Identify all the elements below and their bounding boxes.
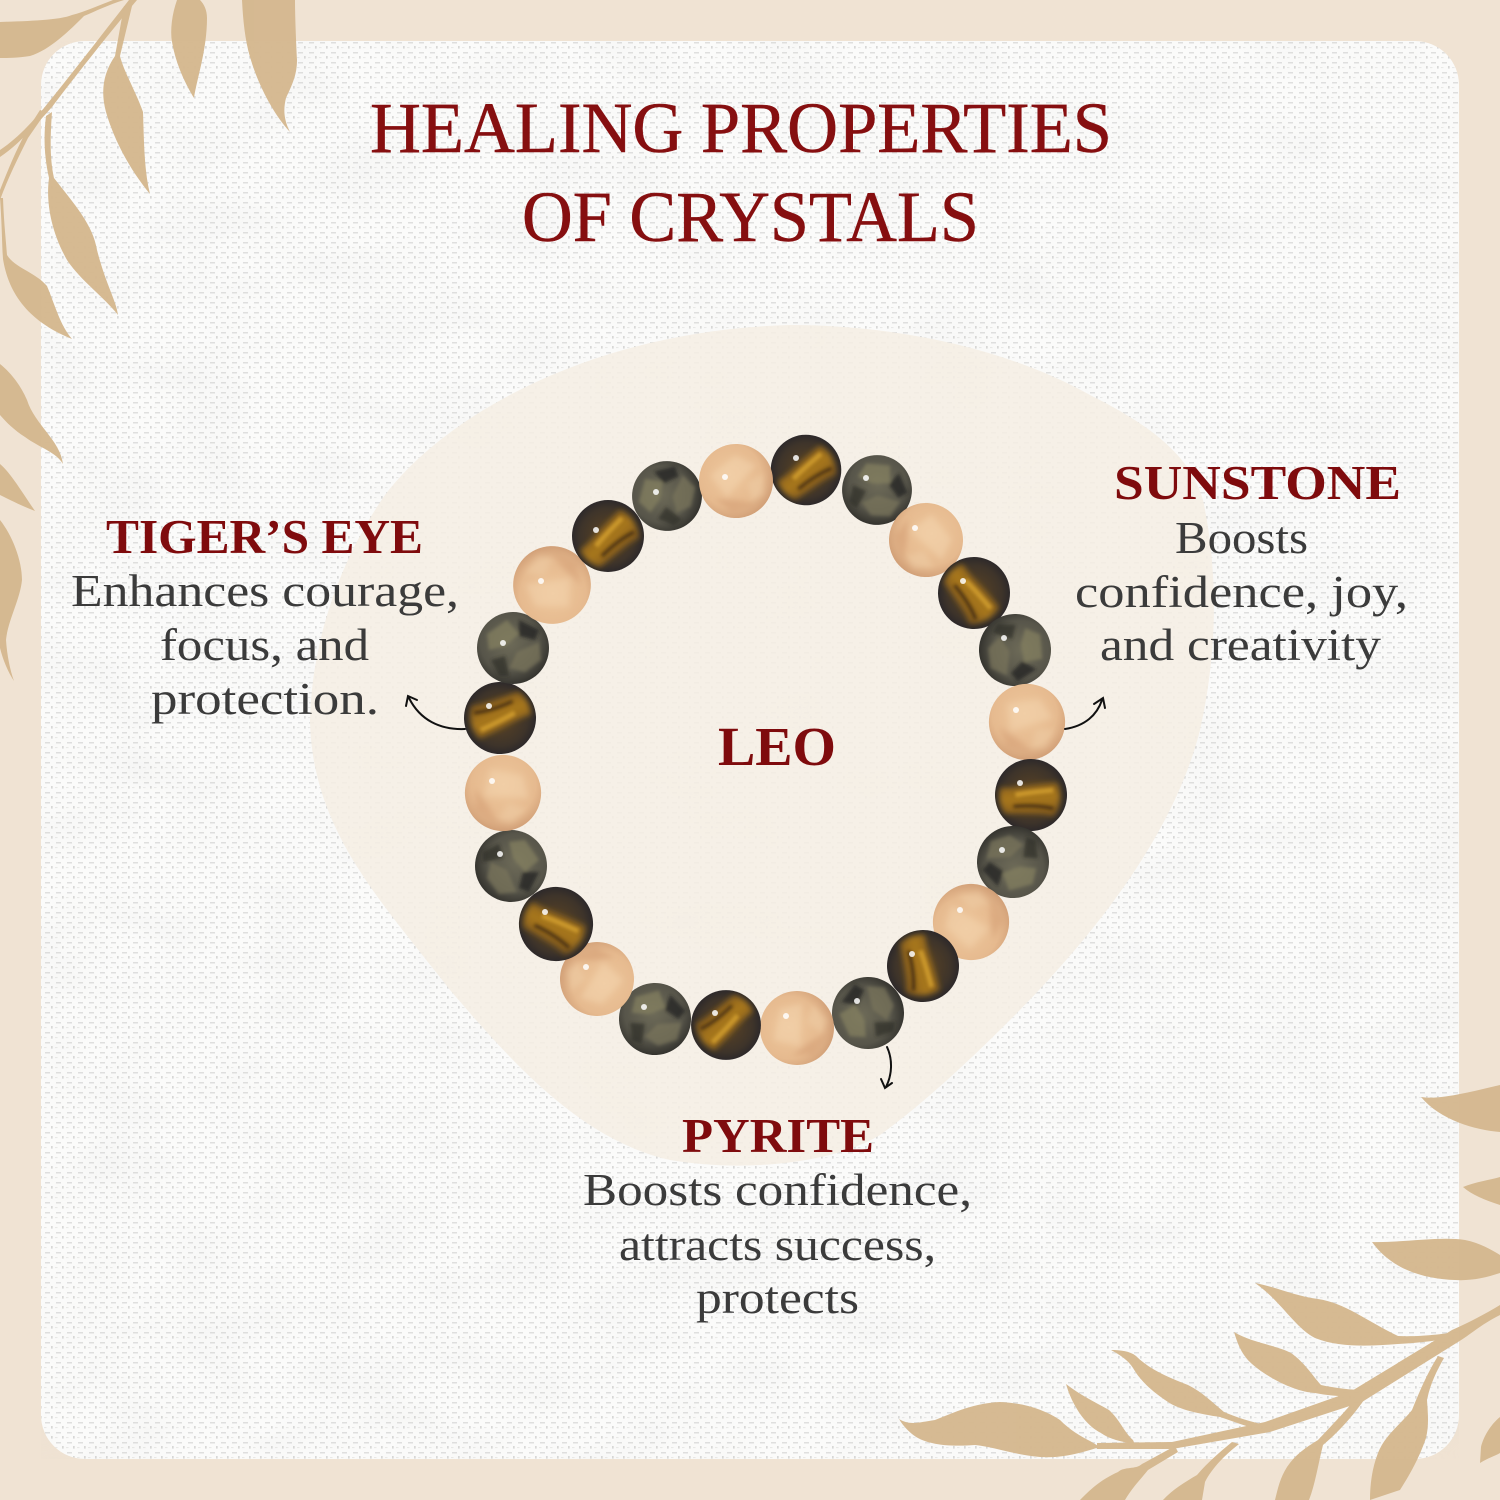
lower branch leaf one <box>1080 1446 1178 1500</box>
callout: sunstone <box>1075 455 1408 670</box>
leaf on top-left branch <box>103 6 150 194</box>
title line two: OF CRYSTALS <box>522 177 979 257</box>
top-left leaf branch <box>0 0 297 681</box>
description: attracts success, <box>619 1220 936 1270</box>
center label: LEO <box>718 716 836 777</box>
leaf on middle stem <box>45 112 118 315</box>
title line one: HEALING PROPERTIES <box>370 88 1112 168</box>
description: focus, and <box>160 620 369 670</box>
beige blob behind bracelet <box>310 325 1214 1166</box>
leaf at top edge, long <box>242 0 297 132</box>
leaf at left edge, upper <box>0 364 63 464</box>
arrow: to pyrite <box>881 1047 892 1088</box>
description: protection. <box>151 674 379 724</box>
leaf at left edge, middle <box>0 464 35 511</box>
edge leaf three <box>1372 1239 1500 1280</box>
heading: PYRITE <box>682 1108 874 1163</box>
description: Enhances courage, <box>71 566 459 616</box>
arrow: to tiger's eye <box>406 696 465 729</box>
large lower leaf <box>899 1402 1100 1457</box>
second leaf <box>1234 1332 1366 1396</box>
description <box>71 566 459 724</box>
edge leaf one <box>1421 1085 1500 1132</box>
leaf at top edge, short <box>171 0 207 98</box>
upper right leaf <box>1255 1283 1461 1346</box>
description: and creativity <box>1100 620 1382 670</box>
description <box>583 1165 972 1323</box>
callout: pyrite <box>583 1108 972 1323</box>
lower branch leaf two <box>1163 1442 1239 1500</box>
heading: SUNSTONE <box>1114 455 1401 510</box>
fourth leaf <box>1066 1384 1136 1447</box>
edge leaf two <box>1463 1177 1500 1205</box>
description <box>1075 513 1408 670</box>
title <box>370 88 1112 257</box>
leaf at left edge, lower <box>0 520 22 681</box>
description: protects <box>696 1273 859 1323</box>
lower branch leaf three <box>1275 1398 1364 1500</box>
leaf on lower stem <box>0 198 72 339</box>
bracelet of beads <box>451 432 1082 1079</box>
heading: TIGER’S EYE <box>106 509 423 564</box>
arrow: to sunstone <box>1065 698 1105 729</box>
description: Boosts <box>1175 513 1308 563</box>
bottom-right leaf branch <box>899 1085 1500 1500</box>
third leaf <box>1111 1350 1265 1431</box>
description: Boosts confidence, <box>583 1165 972 1215</box>
description: confidence, joy, <box>1075 567 1408 617</box>
lower branch leaf four <box>1370 1356 1444 1500</box>
edge leaf four <box>1480 1417 1500 1463</box>
main stem <box>1097 1305 1500 1449</box>
callout: tiger's eye <box>71 509 459 724</box>
